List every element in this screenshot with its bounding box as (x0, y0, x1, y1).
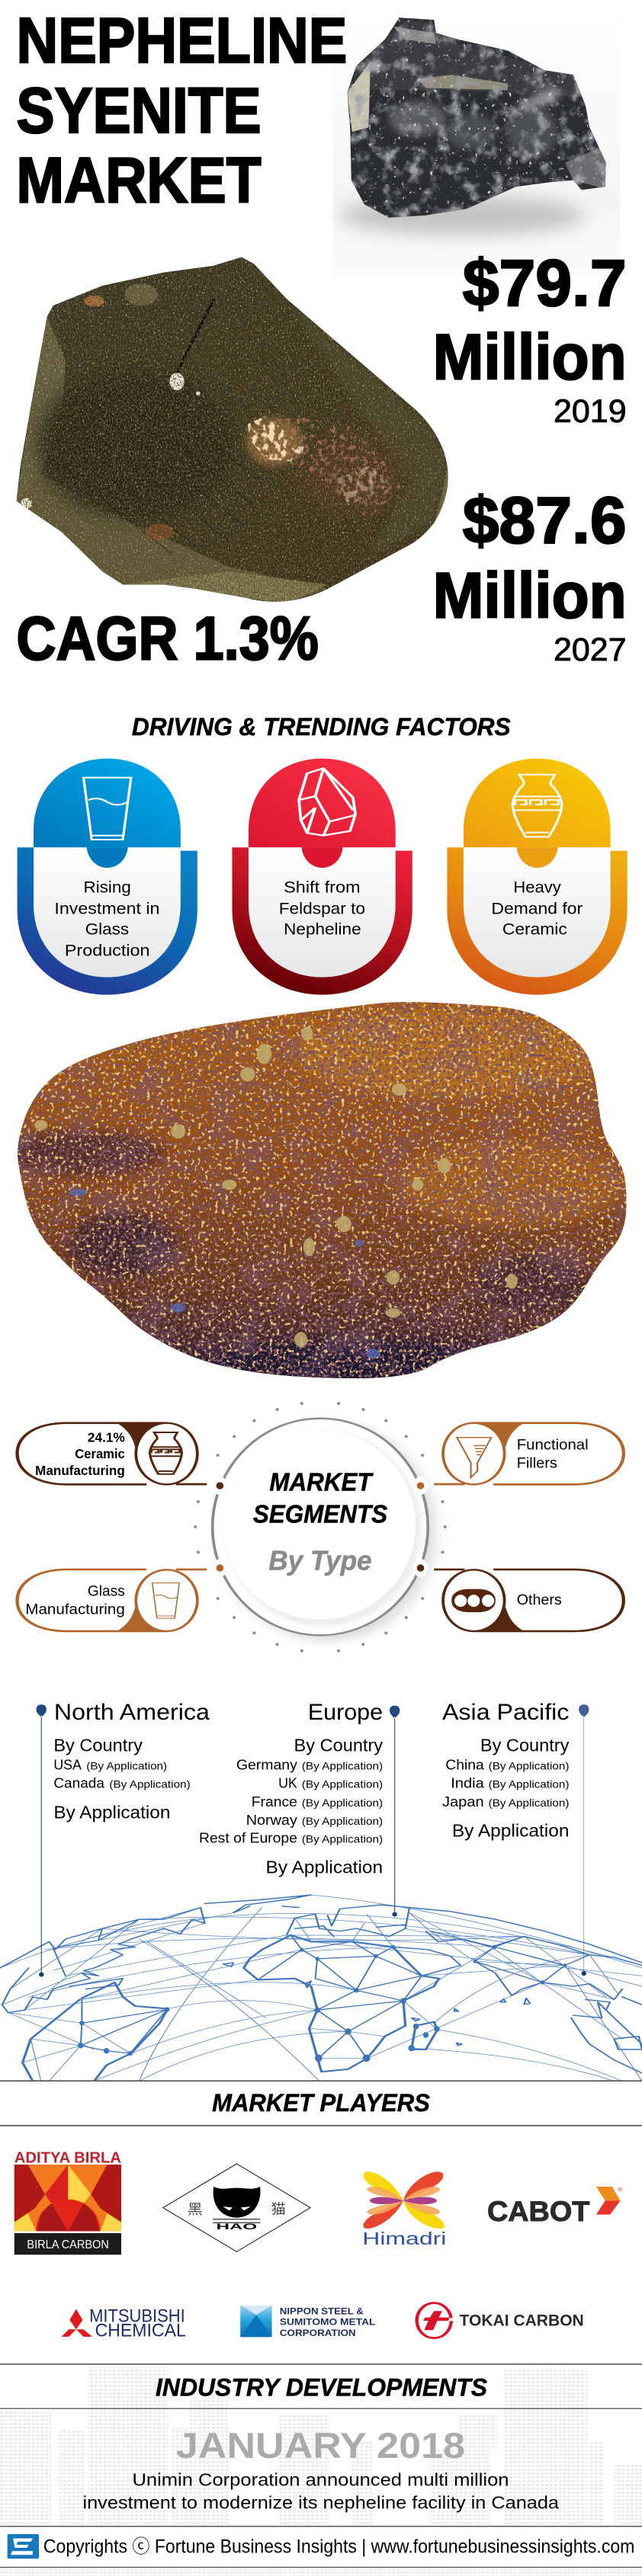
region: north america (37, 1700, 210, 1977)
card text (54, 878, 159, 960)
region: asia pacific: Asia Pacific (442, 1700, 569, 1725)
icon: vase (150, 1432, 181, 1474)
logo: cabot: ® (618, 2187, 623, 2192)
logo: nippon steel and sumitomo metal: NIPPON STEEL & (280, 2306, 364, 2316)
logo: mitsubishi chemical: MITSUBISHI (89, 2306, 185, 2326)
logo: himadri (362, 2171, 446, 2248)
card text: Investment in (54, 900, 159, 918)
region: europe: Europe (308, 1700, 383, 1725)
segment text: Manufacturing (25, 1602, 125, 1618)
segment text: Others (517, 1592, 562, 1608)
region: north america: (By Application) (86, 1760, 167, 1772)
stat: CAGR: CAGR 1.3% (16, 603, 319, 673)
region: asia pacific: Japan (442, 1794, 484, 1810)
card text: Shift from (284, 878, 361, 897)
icon: gem (299, 768, 355, 836)
stat: 2027 market value (433, 483, 627, 667)
card: rising investment in glass production (18, 759, 197, 995)
region: asia pacific (442, 1700, 589, 1976)
region: asia pacific: (By Application) (489, 1760, 569, 1772)
segment text: Ceramic (75, 1446, 125, 1461)
stat: 2019 market value (433, 245, 627, 429)
region: asia pacific: India (451, 1776, 484, 1791)
title: MARKET (16, 145, 262, 216)
card text: Rising (84, 878, 131, 897)
panel: industry developments (0, 2363, 642, 2576)
segment text: Manufacturing (35, 1463, 125, 1478)
card: shift from feldspar to nepheline (232, 759, 412, 995)
pin (37, 1704, 47, 1973)
title (16, 5, 347, 216)
stat: 2019 market value: 2019 (554, 393, 627, 429)
region: europe (199, 1700, 400, 1917)
panel: market segments (18, 1402, 624, 1653)
stat: 2027 market value: Million (433, 560, 627, 632)
development text (82, 2471, 559, 2513)
logo: nippon steel and sumitomo metal (240, 2306, 375, 2338)
heading: market segments by type: By Type (268, 1546, 372, 1576)
map arcs (0, 1895, 642, 2081)
date: JANUARY 2018 (176, 2426, 465, 2466)
logo: aditya birla carbon: BIRLA CARBON (27, 2238, 109, 2251)
card text: Production (65, 942, 150, 960)
large mineral grains (34, 1026, 518, 1347)
ring gaps (213, 1477, 428, 1577)
chart: central circle (194, 1402, 447, 1653)
segment: functional fillers (417, 1423, 624, 1490)
logo: nippon steel and sumitomo metal: SUMITOMO METAL (280, 2316, 375, 2328)
pin (390, 1706, 400, 1914)
panel: header hero (16, 5, 627, 673)
icon: glass (152, 1583, 179, 1618)
card text: Ceramic (502, 920, 567, 939)
heading: market segments by type (253, 1469, 387, 1576)
region: europe: (By Application) (302, 1816, 383, 1827)
segment text: Functional (517, 1437, 589, 1453)
photo: orange brown granular rock (0, 1002, 627, 1392)
map mesh (53, 1919, 589, 2058)
card text (491, 878, 583, 939)
region: europe: (By Application) (302, 1778, 383, 1790)
region: europe: By Application (266, 1857, 383, 1877)
region: north america: USA (53, 1757, 82, 1773)
region: asia pacific: (By Application) (489, 1797, 569, 1809)
icon: glass (84, 778, 131, 840)
region: north america: By Application (53, 1802, 170, 1822)
segment text (35, 1430, 125, 1478)
heading: MARKET PLAYERS (212, 2089, 430, 2117)
map: network globe (0, 1895, 642, 2081)
region: europe: (By Application) (302, 1833, 383, 1845)
region: europe: Norway (246, 1813, 298, 1829)
region: north america: North America (54, 1700, 210, 1725)
panel: market players (0, 2080, 642, 2365)
region: asia pacific: By Country (480, 1735, 570, 1755)
logo: tokai carbon (417, 2303, 584, 2338)
logo: black cat hao: 黑 (188, 2202, 203, 2217)
stat: 2027 market value: 2027 (554, 632, 627, 667)
region: europe: By Country (294, 1735, 384, 1755)
stat: 2027 market value: $87.6 (463, 483, 627, 557)
logo: aditya birla carbon (14, 2149, 121, 2254)
icon: funnel (457, 1438, 491, 1477)
logo: mitsubishi chemical: CHEMICAL (95, 2320, 186, 2341)
icon: three dots (451, 1589, 496, 1612)
rock mineral flecks (248, 415, 401, 519)
footer logo (8, 2534, 39, 2558)
region: asia pacific: China (445, 1757, 484, 1773)
segment text (25, 1583, 125, 1618)
segment: ceramic manufacturing (18, 1423, 223, 1490)
logo: mitsubishi chemical (62, 2306, 186, 2341)
region: europe: (By Application) (302, 1797, 383, 1809)
photo: large olive brown crystal rock (16, 257, 451, 604)
logo: black cat hao: HAO (217, 2222, 258, 2232)
region: north america: Canada (53, 1776, 104, 1791)
panel: regions and world map (0, 1700, 642, 2081)
logo: nippon steel and sumitomo metal: CORPORATION (280, 2328, 356, 2338)
ring dots (194, 1402, 447, 1653)
panel: driving and trending factors (18, 713, 628, 995)
map continents (23, 1935, 439, 2081)
card text: Heavy (513, 878, 561, 897)
card text: Nepheline (284, 920, 361, 939)
stat: 2019 market value: $79.7 (463, 245, 627, 320)
pin (579, 1704, 589, 1973)
segment: glass manufacturing (18, 1564, 223, 1631)
segment text (517, 1437, 589, 1471)
card text: Demand for (491, 900, 583, 918)
region: europe: UK (278, 1776, 297, 1791)
card text: Feldspar to (279, 900, 365, 918)
background: faint city buildings (0, 2367, 642, 2576)
region: europe: (By Application) (302, 1760, 383, 1772)
segment text: Fillers (517, 1455, 557, 1471)
segment text: Glass (88, 1583, 125, 1599)
region: europe: France (252, 1794, 297, 1810)
region: north america: (By Application) (109, 1778, 191, 1790)
logo: himadri: Himadri (362, 2229, 446, 2248)
segment text: 24.1% (88, 1430, 125, 1445)
heading: market segments by type: MARKET (269, 1469, 374, 1496)
photo: dark syenite rock with shadow (332, 18, 621, 247)
icon: vase (512, 775, 562, 837)
region: europe: Germany (236, 1757, 298, 1773)
card: heavy demand for ceramic (447, 759, 628, 995)
heading: market segments by type: SEGMENTS (253, 1500, 387, 1528)
segment: others (417, 1564, 624, 1631)
card text (279, 878, 365, 939)
stat: 2019 market value: Million (433, 322, 627, 393)
region: europe: Rest of Europe (199, 1830, 297, 1846)
card text: Glass (85, 920, 129, 939)
region: asia pacific: (By Application) (489, 1778, 569, 1790)
region: north america: By Country (53, 1735, 143, 1755)
blue mineral grains (69, 1189, 379, 1358)
logo: black cat hao (163, 2164, 310, 2251)
logo: black cat hao: 猫 (271, 2202, 286, 2217)
map nodes (78, 1945, 567, 2062)
title: SYENITE (16, 75, 262, 147)
title: NEPHELINE (16, 5, 347, 77)
logo: aditya birla carbon: ADITYA BIRLA (14, 2149, 121, 2166)
region: asia pacific: By Application (452, 1820, 569, 1841)
